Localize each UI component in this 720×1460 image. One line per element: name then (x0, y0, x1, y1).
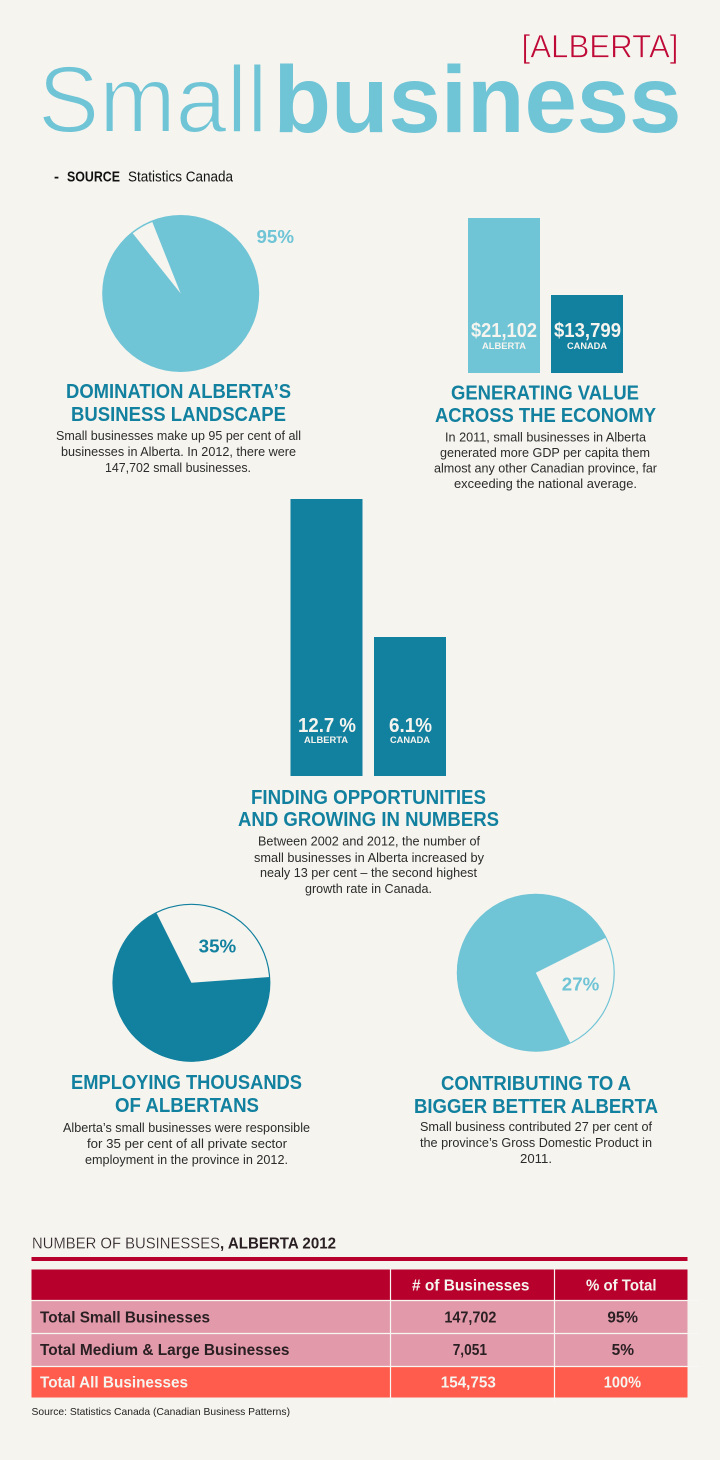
body text: Small business contributed 27 per cent of (420, 1119, 652, 1134)
panel: employing thousands (63, 904, 310, 1167)
heading (435, 382, 657, 427)
body text: Alberta’s small businesses were responsible (63, 1120, 310, 1135)
title word: business: business (274, 47, 682, 153)
body text (56, 428, 301, 475)
bar chart: GDP per capita (468, 218, 623, 373)
bar chart: GDP per capita: $13,799 (554, 320, 621, 342)
pie chart: 35 per cent: 35% (199, 937, 236, 957)
panel: finding opportunities (238, 499, 499, 896)
table row: medium and large businesses (32, 1334, 688, 1366)
panel: contributing (414, 894, 658, 1166)
body text: In 2011, small businesses in Alberta (445, 430, 647, 444)
heading (71, 1072, 302, 1117)
panel: number of businesses table (32, 1236, 699, 1418)
table heading: NUMBER OF BUSINESSES (32, 1236, 220, 1252)
heading (414, 1073, 658, 1118)
heading: DOMINATION ALBERTA’S (66, 381, 291, 403)
table row: total (32, 1367, 688, 1398)
bar chart: growth rate: 6.1% (389, 715, 432, 737)
table row: small businesses: 95% (607, 1310, 638, 1327)
subtitle: Alberta: [ALBERTA] (522, 28, 678, 64)
table header row (32, 1270, 688, 1300)
panel: generating value (434, 218, 658, 491)
panel: domination (56, 215, 301, 475)
body text (63, 1120, 310, 1167)
body text: the province’s Gross Domestic Product in (420, 1135, 652, 1150)
source line (54, 168, 234, 186)
table row: small businesses (32, 1301, 688, 1333)
heading: ACROSS THE ECONOMY (435, 405, 657, 427)
heading: OF ALBERTANS (115, 1095, 259, 1117)
body text: growth rate in Canada. (305, 881, 432, 896)
table row: medium and large businesses: 5% (612, 1342, 634, 1359)
table header row: % of Total (586, 1278, 656, 1295)
body text: employment in the province in 2012. (85, 1152, 288, 1167)
pie chart: 27 per cent: 27% (562, 975, 599, 995)
source line: - (54, 168, 59, 186)
table (32, 1269, 699, 1403)
bar chart: growth rate: CANADA (390, 735, 431, 745)
table row: medium and large businesses: Total Medium & Large Businesses (40, 1342, 290, 1359)
bar chart: GDP per capita: ALBERTA (482, 341, 527, 351)
table row: medium and large businesses: 7,051 (453, 1342, 487, 1359)
heading: EMPLOYING THOUSANDS (71, 1072, 302, 1094)
heading (238, 787, 499, 831)
body text (434, 430, 658, 491)
bar chart: GDP per capita: $21,102 (471, 320, 537, 342)
heading: BUSINESS LANDSCAPE (71, 404, 286, 426)
body text: small businesses in Alberta increased by (254, 850, 484, 865)
body text: 147,702 small businesses. (105, 460, 251, 475)
table source note: Source: Statistics Canada (Canadian Business Patterns) (32, 1406, 290, 1418)
body text: generated more GDP per capita them (440, 445, 650, 460)
body text: Small businesses make up 95 per cent of all (56, 428, 301, 443)
table row: total: 100% (604, 1375, 641, 1392)
body text: nealy 13 per cent – the second highest (260, 865, 477, 880)
table header row: # of Businesses (412, 1278, 530, 1295)
pie chart: 95 per cent (102, 215, 294, 372)
heading: BIGGER BETTER ALBERTA (414, 1096, 658, 1118)
title word: Small: Small (38, 47, 268, 153)
table row: total: Total All Businesses (40, 1375, 188, 1392)
body text: businesses in Alberta. In 2012, there were (61, 444, 296, 459)
heading: FINDING OPPORTUNITIES (251, 787, 486, 809)
pie chart: 35 per cent (113, 904, 270, 1062)
body text (254, 834, 484, 896)
bar chart: growth rate: ALBERTA (304, 735, 349, 745)
table row: total: 154,753 (441, 1375, 496, 1392)
pie chart: 95 per cent: 95% (256, 227, 294, 247)
bar chart: growth rate: 12.7 % (298, 715, 356, 737)
body text: for 35 per cent of all private sector (87, 1136, 288, 1151)
body text: exceeding the national average. (454, 476, 637, 491)
heading: GENERATING VALUE (451, 382, 639, 404)
table row: small businesses: Total Small Businesses (40, 1310, 210, 1327)
body text: Between 2002 and 2012, the number of (258, 834, 480, 848)
table heading: , ALBERTA 2012 (220, 1236, 336, 1252)
heading: AND GROWING IN NUMBERS (238, 809, 499, 831)
body text: 2011. (520, 1151, 552, 1166)
table row: small businesses: 147,702 (444, 1310, 496, 1327)
source line: SOURCE (67, 168, 120, 186)
heading (66, 381, 291, 426)
pie chart: 27 per cent (457, 894, 614, 1051)
title (38, 28, 682, 153)
bar chart: growth rate (290, 499, 446, 776)
heading: CONTRIBUTING TO A (441, 1073, 631, 1095)
source line: Statistics Canada (128, 168, 234, 186)
body text: almost any other Canadian province, far (434, 460, 658, 476)
bar chart: GDP per capita: CANADA (567, 341, 608, 351)
table heading (32, 1236, 336, 1252)
body text (420, 1119, 652, 1166)
